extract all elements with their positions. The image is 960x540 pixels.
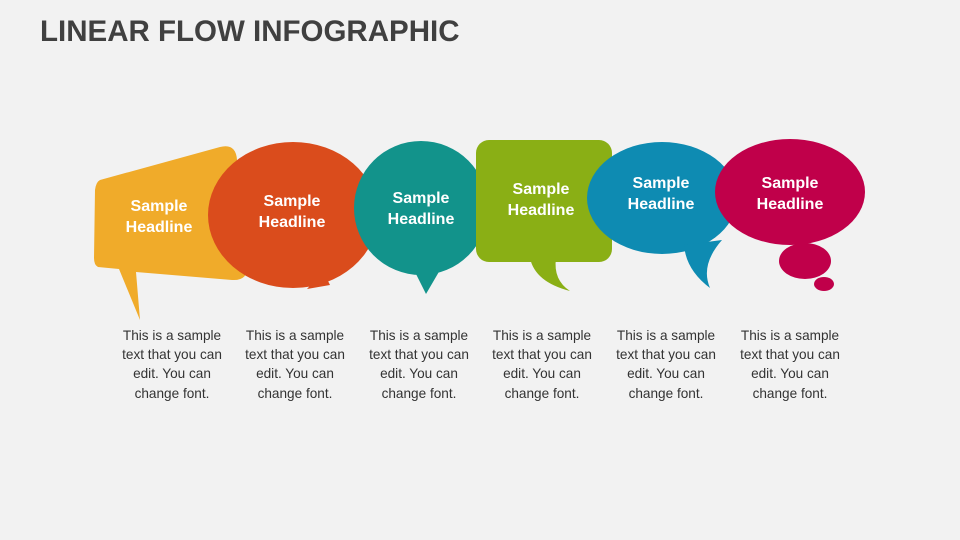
text 5: edit. You can xyxy=(627,366,705,381)
text 4: change font. xyxy=(505,386,579,401)
text 2: text that you can xyxy=(245,347,345,362)
text 4 xyxy=(492,328,592,401)
text 3: edit. You can xyxy=(380,366,458,381)
title: LINEAR FLOW INFOGRAPHIC xyxy=(40,15,460,48)
text 1: change font. xyxy=(135,386,209,401)
text 5: text that you can xyxy=(616,347,716,362)
text 4: edit. You can xyxy=(503,366,581,381)
text 5: change font. xyxy=(629,386,703,401)
text 2 xyxy=(245,328,345,401)
bubble 4 green xyxy=(476,140,612,291)
text 1: text that you can xyxy=(122,347,222,362)
text 3: text that you can xyxy=(369,347,469,362)
text 5: This is a sample xyxy=(617,328,715,343)
text 6: text that you can xyxy=(740,347,840,362)
text 3: This is a sample xyxy=(370,328,468,343)
bubble 6 magenta xyxy=(715,139,865,291)
text 6: change font. xyxy=(753,386,827,401)
text 2: change font. xyxy=(258,386,332,401)
text 3: change font. xyxy=(382,386,456,401)
text 4: text that you can xyxy=(492,347,592,362)
text 2: edit. You can xyxy=(256,366,334,381)
text 1: edit. You can xyxy=(133,366,211,381)
text 5 xyxy=(616,328,716,401)
bubble 4 green: Sample xyxy=(513,181,570,198)
bubble 3 teal xyxy=(354,141,488,294)
text 6 xyxy=(740,328,840,401)
bubble 2 orange xyxy=(208,142,378,289)
bubble 1 yellow: Sample xyxy=(131,198,188,215)
bubble 5 blue: Sample xyxy=(633,175,690,192)
bubble 1 yellow xyxy=(94,146,248,320)
bubble 5 blue xyxy=(587,142,737,288)
text 1: This is a sample xyxy=(123,328,221,343)
text 3 xyxy=(369,328,469,401)
text 2: This is a sample xyxy=(246,328,344,343)
bubble 3 teal: Headline xyxy=(388,211,454,228)
text 6: edit. You can xyxy=(751,366,829,381)
bubble 6 magenta: Headline xyxy=(757,196,823,213)
bubble 5 blue: Headline xyxy=(628,196,694,213)
text 6: This is a sample xyxy=(741,328,839,343)
bubble 6 magenta: Sample xyxy=(762,175,819,192)
bubble 4 green: Headline xyxy=(508,202,574,219)
bubble 3 teal: Sample xyxy=(393,190,450,207)
text 4: This is a sample xyxy=(493,328,591,343)
bubble 2 orange: Sample xyxy=(264,193,321,210)
bubble 2 orange: Headline xyxy=(259,214,325,231)
bubble 1 yellow: Headline xyxy=(126,219,192,236)
text 1 xyxy=(122,328,222,401)
